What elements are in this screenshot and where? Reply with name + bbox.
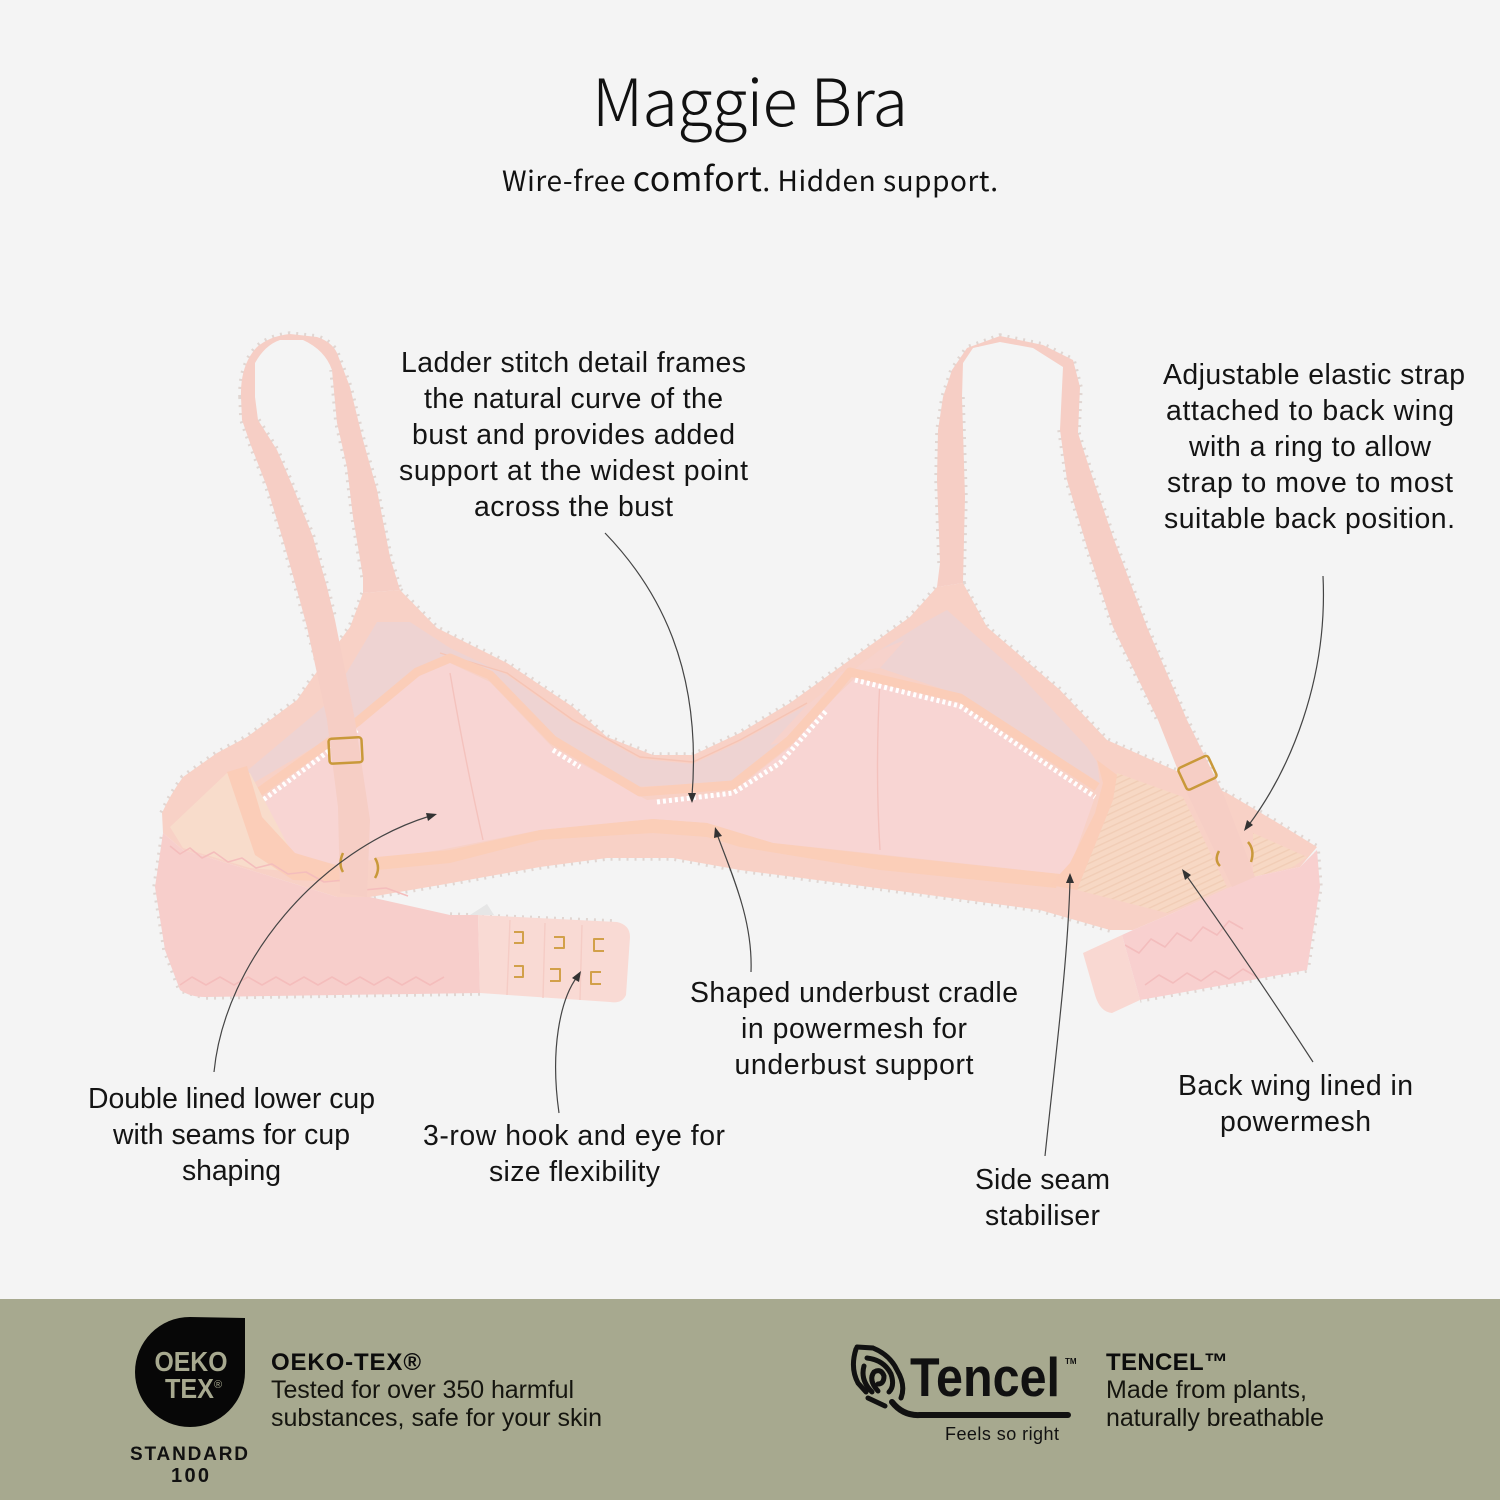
callout: ladder stitch: Ladder stitch detail frames [401,347,746,379]
icon: OEKO-TEX logo [130,1317,248,1487]
callout: lower cup [88,1083,375,1187]
callout: ladder stitch: the natural curve of the [424,383,723,415]
wordmark: Tencel [910,1346,1060,1408]
right back wing [1122,850,1320,1000]
callout: lower cup: Double lined lower cup [88,1083,375,1115]
right mesh [1077,773,1307,913]
callout: adjustable strap: with a ring to allow [1188,431,1431,463]
neckline lining [248,610,1100,787]
subtitle: Wire-free comfort. Hidden support. [502,152,998,201]
icon: Tencel logo [853,1346,1077,1444]
text: Tencel: Made from plants, [1106,1376,1307,1404]
side seam trim [1050,760,1117,890]
callout: underbust cradle: Shaped underbust cradle [690,977,1018,1009]
left wing elastic zigzag [170,846,444,985]
icon: OEKO-TEX logo: TEX [165,1373,214,1404]
icon: Tencel logo: Feels so right [945,1424,1059,1444]
text: OEKO-TEX: OEKO-TEX® [271,1349,421,1376]
hooks [514,932,604,984]
callout: underbust cradle: in powermesh for [741,1013,967,1045]
callout: ladder stitch: bust and provides added [412,419,735,451]
callout: underbust cradle [690,977,1018,1081]
callout: adjustable strap: Adjustable elastic strap [1163,359,1465,391]
callout: ladder stitch [399,347,748,523]
callout: ladder stitch: support at the widest point [399,455,748,487]
callout: underbust cradle: underbust support [734,1049,974,1081]
left trim [227,766,345,882]
ladder stitch holes [259,680,1095,803]
left mesh [170,773,337,875]
text: Tencel [1106,1349,1324,1432]
right slider [1177,755,1217,791]
callout: lower cup: with seams for cup [112,1119,350,1151]
callout: adjustable strap: suitable back position. [1164,503,1455,535]
cup seams [450,673,880,850]
text: OEKO-TEX: substances, safe for your skin [271,1404,602,1432]
left ring [340,853,378,878]
right strap [937,336,1255,887]
arrow: hook and eye [556,971,581,1113]
text: OEKO-TEX: Tested for over 350 harmful [271,1376,574,1404]
arrow: back wing [1182,869,1313,1062]
callout: adjustable strap: strap to move to most [1167,467,1453,499]
neckline stitch line [440,653,807,762]
underbust cradle [377,819,1060,888]
text: OEKO-TEX [271,1349,602,1432]
arrow: adjustable strap [1244,576,1323,831]
leaf spiral [853,1347,1068,1415]
icon: Tencel logo: TM [1065,1357,1077,1366]
icon: OEKO-TEX logo: STANDARD [130,1444,248,1465]
text: Tencel: naturally breathable [1106,1404,1324,1432]
callout: hook and eye: size flexibility [489,1156,661,1188]
icon: OEKO-TEX logo: OEKO [154,1346,228,1377]
arrow: side seam [1045,873,1074,1156]
hook tab seams [507,920,582,1000]
callout: lower cup: shaping [182,1155,281,1187]
fold above right cup [770,640,905,745]
arrow: lower cup [214,813,437,1072]
main band silhouette [162,583,1317,930]
left strap [241,334,400,897]
hook and eye tab [478,915,630,1002]
arrow: underbust cradle [714,827,751,972]
left slider [328,737,363,764]
footer band [0,1299,1500,1500]
callout: side seam: Side seam [975,1164,1110,1196]
callout: back wing: Back wing lined in [1178,1070,1413,1102]
callout: hook and eye: 3-row hook and eye for [423,1120,725,1152]
left back wing [155,833,480,997]
product illustration: bra [155,334,1320,1013]
callout: back wing: powermesh [1220,1106,1371,1138]
icon: OEKO-TEX logo: 100 [171,1465,209,1487]
lower cups [258,663,1095,874]
callout: adjustable strap [1163,359,1465,535]
text: Tencel: TENCEL™ [1106,1349,1228,1376]
right closure tab [1083,935,1140,1013]
callout: hook and eye [423,1120,725,1188]
right ring [1217,842,1252,866]
ladder stitch trim [255,658,1097,795]
title: Maggie Bra [592,51,908,145]
white tag [470,904,494,915]
callout: side seam [975,1164,1110,1232]
right wing elastic zigzag [1125,921,1257,985]
callout: ladder stitch: across the bust [474,491,673,523]
callout: side seam: stabiliser [985,1200,1100,1232]
callout: back wing [1178,1070,1413,1138]
callout: adjustable strap: attached to back wing [1166,395,1454,427]
picot edging [155,334,1320,1000]
arrow: ladder stitch [605,533,696,803]
icon: OEKO-TEX logo: ® [214,1379,222,1391]
